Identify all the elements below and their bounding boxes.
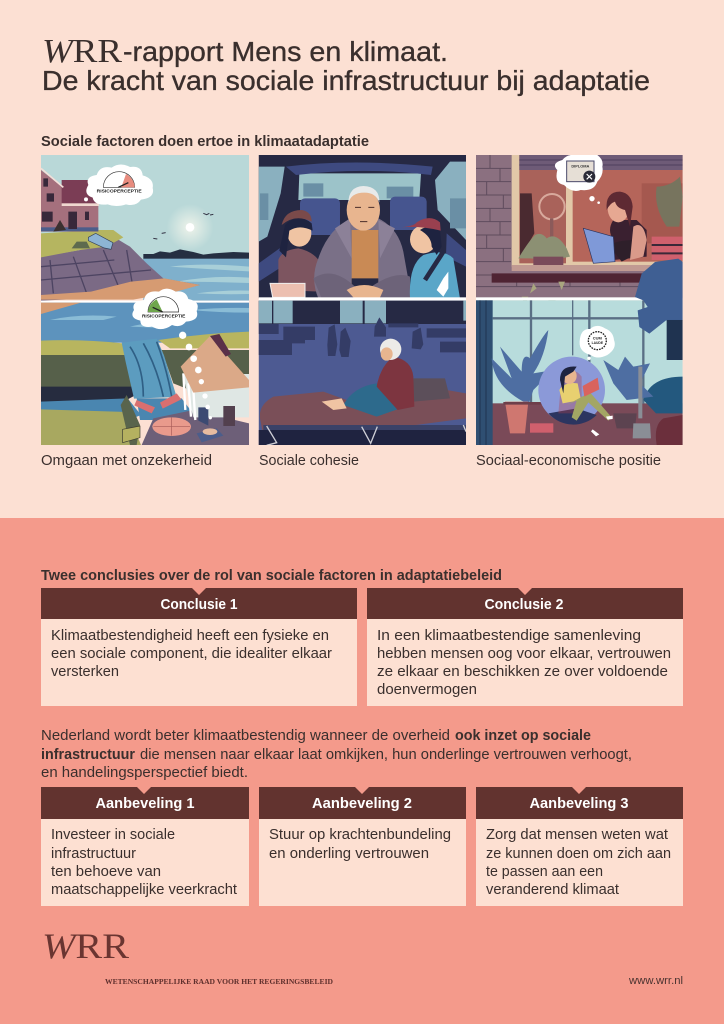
cloud: risicoperceptie high (86, 164, 153, 206)
panel: conclusie 1: Conclusie 1 (160, 596, 238, 613)
thought bubbles (179, 332, 212, 419)
panel: conclusie 1: versterken (51, 664, 119, 680)
panel: aanbeveling 2: Stuur op krachtenbundeling (269, 827, 451, 843)
panel: aanbeveling 2: Aanbeveling 2 (312, 795, 412, 812)
cloud: risicoperceptie high: RISICOPERCEPTIE (97, 188, 142, 194)
footer: website: www.wrr.nl (628, 975, 683, 987)
text block: beleidsadvies: en handelingsperspectief biedt. (41, 765, 248, 781)
illustration: sociaal-economische positie (476, 155, 683, 445)
panel: conclusie 2 (367, 588, 683, 706)
panel: conclusie 2: hebben mensen oog voor elkaar, vertrouwen (377, 646, 671, 662)
heading: sociale factoren: Sociale factoren doen ertoe in klimaatadaptatie (41, 134, 369, 150)
panel: conclusie 1 (41, 588, 357, 706)
background figures and cots (259, 317, 466, 357)
panel: aanbeveling 1: maatschappelijke veerkracht (51, 882, 237, 898)
top background (0, 0, 724, 518)
cloud: diploma: DIPLOMA (571, 164, 590, 168)
cloud: cum laude (580, 326, 615, 360)
cloud: cum laude: LAUDE (592, 341, 604, 345)
caption: cohesie: Sociale cohesie (259, 453, 359, 469)
text block: beleidsadvies (41, 728, 632, 781)
title (42, 33, 650, 96)
panel: conclusie 2: doenvermogen (377, 682, 477, 698)
text block: beleidsadvies: infrastructuur (41, 747, 135, 763)
text block: beleidsadvies: Nederland wordt beter klimaatbestendig wanneer de overheid (41, 728, 450, 744)
panel: aanbeveling 1: infrastructuur (51, 846, 136, 862)
panel: conclusie 1: Klimaatbestendigheid heeft een fysieke en (51, 628, 329, 644)
panel: aanbeveling 3 (476, 787, 683, 906)
panel: aanbeveling 2 (259, 787, 466, 906)
panel: aanbeveling 3: ze kunnen doen om zich aan (486, 846, 671, 862)
cloud: diploma (555, 155, 603, 204)
cloud: cum laude: CUM (593, 335, 603, 340)
panel: conclusie 2: ze elkaar en beschikken ze over voldoende (377, 664, 668, 680)
panel: aanbeveling 3: te passen aan een (486, 864, 603, 880)
text block: beleidsadvies: die mensen naar elkaar laat omkijken, hun onderlinge vertrouwen verhoogt, (140, 747, 632, 763)
heading: twee conclusies: Twee conclusies over de rol van sociale factoren in adaptatiebeleid (41, 568, 502, 584)
title: WRR (42, 33, 122, 70)
footer: organisation name: WETENSCHAPPELIJKE RAAD VOOR HET REGERINGSBELEID (105, 977, 334, 986)
caption: onzekerheid: Omgaan met onzekerheid (41, 453, 212, 469)
panel: aanbeveling 3: veranderend klimaat (486, 882, 619, 898)
panel: aanbeveling 1 (41, 787, 249, 906)
panel: aanbeveling 1: Investeer in sociale (51, 827, 175, 843)
panel: aanbeveling 3: Zorg dat mensen weten wat (486, 827, 668, 843)
panel: conclusie 1: een sociale component, die idealiter elkaar (51, 646, 332, 662)
panel: aanbeveling 3: Aanbeveling 3 (530, 795, 628, 812)
cloud: risicoperceptie low: RISICOPERCEPTIE (142, 313, 186, 319)
panel: conclusie 2: Conclusie 2 (484, 596, 564, 613)
illustration: omgaan met onzekerheid (41, 155, 249, 445)
bottom background (0, 518, 724, 1024)
panel: aanbeveling 1: Aanbeveling 1 (96, 795, 194, 812)
title: De kracht van sociale infrastructuur bij adaptatie (42, 65, 650, 96)
caption: positie: Sociaal-economische positie (476, 453, 661, 469)
panel: conclusie 2: In een klimaatbestendige samenleving (377, 628, 641, 644)
cloud: risicoperceptie low (132, 289, 198, 329)
logo: WRR: WRR (42, 926, 129, 966)
title: -rapport Mens en klimaat. (123, 36, 448, 67)
text block: beleidsadvies: ook inzet op sociale (455, 728, 591, 744)
illustration: sociale cohesie (259, 155, 466, 445)
panel: aanbeveling 2: en onderling vertrouwen (269, 846, 429, 862)
panel: aanbeveling 1: ten behoeve van (51, 864, 161, 880)
